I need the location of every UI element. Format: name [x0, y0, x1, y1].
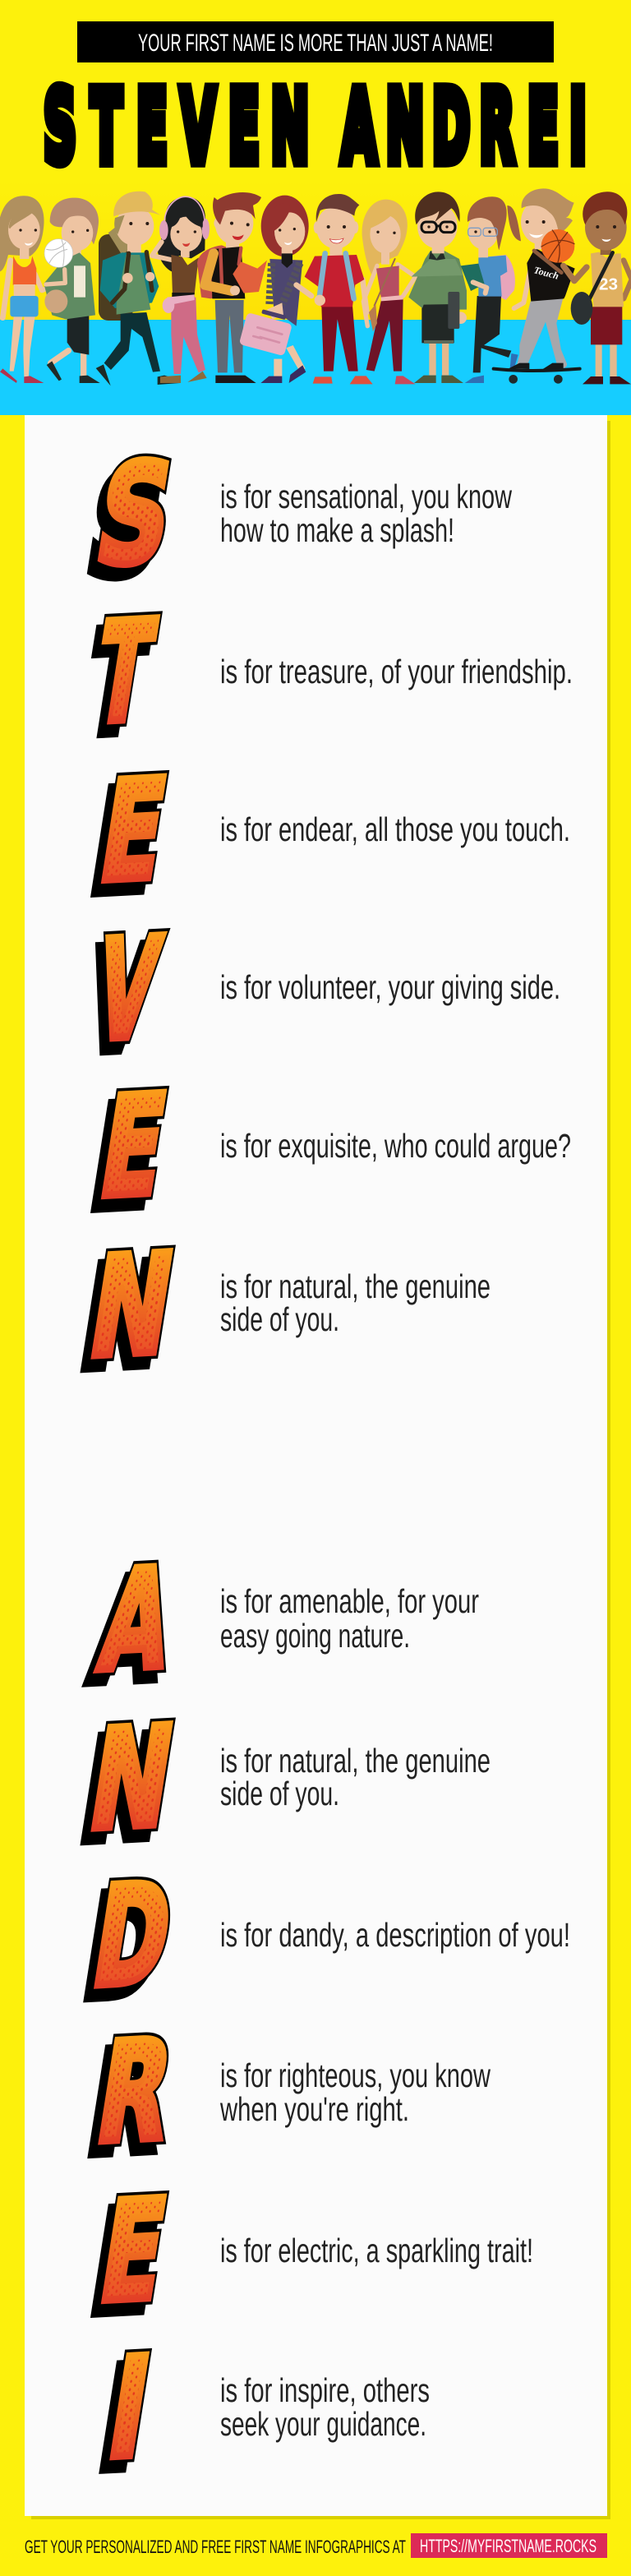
person: blonde girl: [362, 200, 416, 384]
row: R: [88, 2010, 491, 2174]
text: I meaning: is for inspire, others: [220, 2371, 430, 2409]
letter E: E: [90, 2171, 176, 2334]
text: A meaning: is for amenable, for your: [220, 1582, 479, 1620]
row: T: [85, 593, 573, 755]
letter E: E: [90, 750, 176, 913]
letter S: S: [87, 432, 183, 597]
white panel with shadow: [25, 415, 610, 2519]
person: boy with glasses and green sweater: [408, 192, 467, 383]
title: STEVEN ANDREI: [44, 71, 587, 186]
person: girl in orange top: [0, 196, 63, 383]
text: N meaning: is for natural, the genuine: [220, 1267, 491, 1305]
person: boy on skateboard with basketball: Touch: [532, 264, 560, 282]
text: S meaning: how to make a splash!: [220, 511, 454, 549]
text: N meaning: [220, 1267, 491, 1338]
text: R meaning: [219, 2057, 491, 2128]
text: S meaning: is for sensational, you know: [220, 478, 512, 515]
footer call to action: GET YOUR PERSONALIZED AND FREE FIRST NAME INFOGRAPHICS AT: [25, 2537, 406, 2557]
text: R meaning: when you're right.: [219, 2090, 409, 2128]
text: A meaning: [220, 1582, 479, 1655]
letter V: V: [86, 909, 168, 1073]
letter D: D: [84, 1855, 181, 2019]
row: E: [90, 750, 570, 913]
row: V: [86, 909, 560, 1073]
letter E: E: [90, 750, 176, 913]
person: girl with ponytail, tablet and skate: [461, 196, 521, 383]
row: A: [91, 1540, 479, 1703]
person: boy with cap and backpack: [96, 192, 181, 385]
blue floor band: [0, 320, 631, 415]
person: girl with pink suitcase: [239, 196, 309, 383]
row: E second: [90, 1066, 571, 1229]
row: D: [84, 1855, 570, 2019]
letter E: E: [90, 1066, 176, 1229]
row: N second: [81, 1697, 491, 1861]
letter E: E: [90, 1066, 176, 1229]
row: E third: [90, 2171, 533, 2334]
letter D: D: [84, 1855, 181, 2019]
letter N: N: [81, 1224, 183, 1388]
letter N: N: [81, 1224, 183, 1388]
header banner: [77, 21, 554, 62]
letter E: E: [90, 2171, 176, 2334]
letter R: R: [88, 2010, 182, 2174]
person: boy with book: [197, 192, 267, 383]
letter N: N: [81, 1697, 183, 1861]
person: boy in red shirt with backpack straps: [297, 194, 373, 384]
yellow wall behind students: [0, 181, 631, 321]
person: girl with headphones: [152, 196, 210, 383]
text: A meaning: easy going nature.: [220, 1617, 410, 1655]
letter N: N: [81, 1697, 183, 1861]
row: S: [87, 432, 512, 597]
illustration: group of students, right half: [297, 188, 631, 384]
text: I meaning: seek your guidance.: [220, 2405, 426, 2443]
person: girl with volleyball and green jacket: [44, 198, 100, 383]
letter A: A: [91, 1540, 182, 1703]
letter I: I: [99, 2328, 159, 2490]
letter S: S: [87, 432, 183, 597]
letter T: T: [85, 593, 162, 755]
text: R meaning: is for righteous, you know: [220, 2057, 491, 2094]
illustration: group of students, left half: [0, 192, 309, 385]
person: boy on skateboard with basketball: [494, 188, 587, 384]
text: N meaning: side of you.: [220, 1300, 339, 1338]
letter V: V: [86, 909, 168, 1073]
text: I meaning: [220, 2371, 430, 2443]
text: N meaning: side of you.: [220, 1775, 339, 1812]
text: N meaning: [220, 1742, 491, 1812]
letter R: R: [88, 2010, 182, 2174]
row: I: [99, 2328, 430, 2490]
letter I: I: [99, 2328, 159, 2490]
row: N: [81, 1224, 491, 1388]
person: boy in jersey with shoulder bag: [571, 192, 631, 384]
text: S meaning: [220, 478, 512, 549]
person: boy in jersey with shoulder bag: 23: [599, 275, 618, 294]
letter A: A: [91, 1540, 182, 1703]
letter T: T: [85, 593, 162, 755]
text: N meaning: is for natural, the genuine: [220, 1742, 491, 1780]
